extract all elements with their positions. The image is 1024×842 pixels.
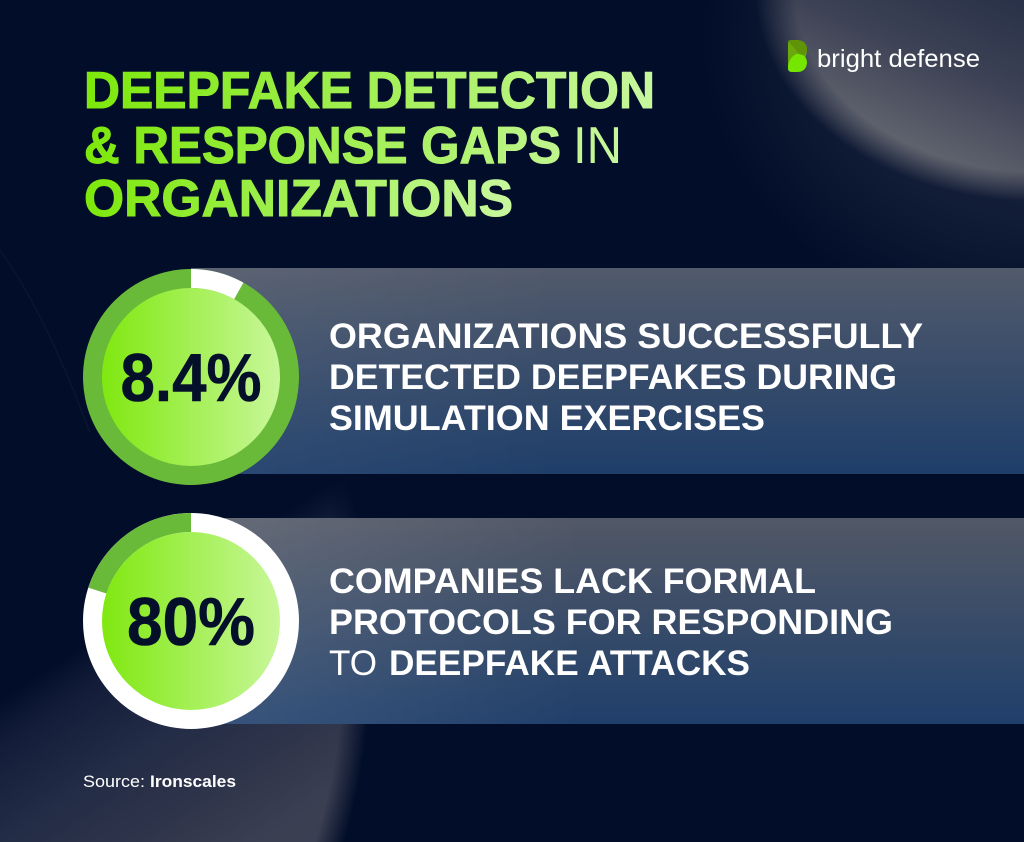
panel: detection stat bbox=[83, 268, 1024, 485]
panel text: DEEPFAKE ATTACKS bbox=[389, 644, 750, 683]
panel text: COMPANIES LACK FORMAL bbox=[329, 562, 816, 601]
panel text bbox=[329, 317, 923, 438]
donut chart: 80%: 80% bbox=[127, 584, 255, 660]
title: & RESPONSE GAPS bbox=[84, 117, 561, 175]
title: IN bbox=[573, 117, 622, 175]
source: Ironscales bbox=[150, 772, 236, 791]
source: Source: bbox=[83, 772, 145, 791]
donut chart: 8.4% bbox=[83, 269, 299, 485]
title: ORGANIZATIONS bbox=[84, 170, 513, 228]
icon: logo mark bbox=[788, 40, 807, 72]
panel background bbox=[191, 518, 1024, 724]
panel text bbox=[329, 562, 893, 683]
panel background bbox=[191, 268, 1024, 474]
panel text: PROTOCOLS FOR RESPONDING bbox=[329, 603, 893, 642]
logo wordmark: bright defense bbox=[817, 45, 980, 73]
panel text: SIMULATION EXERCISES bbox=[329, 399, 765, 438]
logo: bright defense bbox=[788, 40, 980, 73]
panel text: TO bbox=[329, 644, 377, 683]
panel text: ORGANIZATIONS SUCCESSFULLY bbox=[329, 317, 923, 356]
donut chart: 80% bbox=[83, 513, 299, 729]
panel text: DETECTED DEEPFAKES DURING bbox=[329, 358, 897, 397]
source bbox=[83, 772, 236, 791]
donut chart: 8.4%: 8.4% bbox=[120, 340, 262, 416]
title: DEEPFAKE DETECTION bbox=[84, 62, 655, 120]
title bbox=[84, 62, 655, 228]
panel: response stat bbox=[83, 513, 1024, 729]
